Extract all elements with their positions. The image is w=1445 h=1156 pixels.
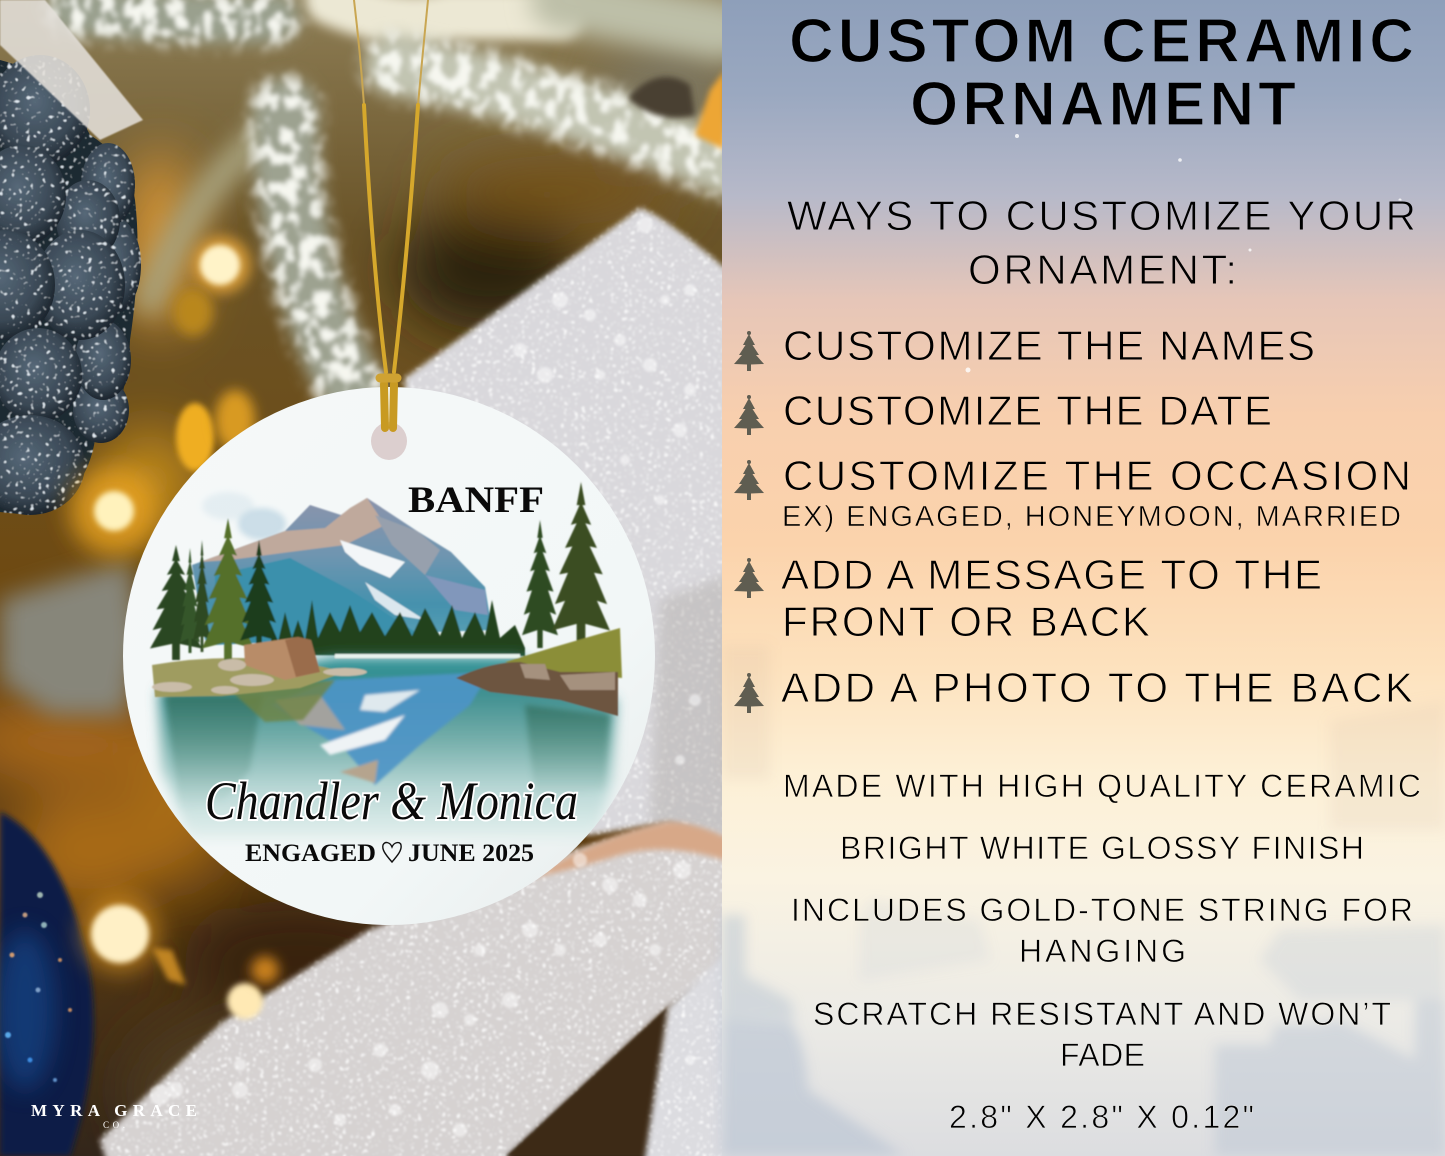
frosted branch top [70,10,275,18]
item: message [781,551,1322,645]
watercolor sky background [722,0,1445,1156]
faded skyline [722,645,1445,1156]
feature: durability: FADE [1060,1037,1145,1073]
occasion and date: JUNE 2025 [408,840,534,867]
right shore rocks [456,662,618,716]
title: CUSTOM CERAMIC [789,7,1414,76]
feature: string: INCLUDES GOLD-TONE STRING FOR [791,892,1413,928]
product details panel [722,0,1445,1156]
icon: heart [383,843,401,862]
title: ORNAMENT [910,70,1296,139]
lower glitter ribbon [100,822,750,1156]
frosted branch upper right [395,65,725,165]
reflection of left shore [230,680,335,722]
feature: string [791,892,1413,969]
clouds [202,492,286,540]
watermark: CO. [103,1120,125,1130]
dark gap between ribbons [507,1007,668,1156]
feature: dimensions: 2.8" X 2.8" X 0.12" [949,1099,1254,1135]
ribbon sparkle bokeh [150,217,701,1137]
item: occasion: CUSTOMIZE THE OCCASION [783,452,1411,499]
blue glitter bauble [0,812,94,1156]
blurred branch lower left [0,560,140,715]
frosted branch center [285,110,350,385]
blue-grey glitter baubles [0,55,141,515]
ornament hole [371,422,407,460]
silver glitter ribbon [400,208,750,850]
icon: tree [734,331,764,371]
distant treeline [270,600,525,656]
item: photo: ADD A PHOTO TO THE BACK [781,664,1413,711]
boulder [244,637,320,680]
right bank [505,628,622,678]
gold string [354,0,428,372]
item: occasion: EX) ENGAGED, HONEYMOON, MARRIED [782,501,1401,533]
occasion and date: ENGAGED [245,840,376,867]
icon: tree [734,395,764,435]
tree reflections [165,695,610,810]
item: message: FRONT OR BACK [782,598,1150,645]
mountain reflection [270,672,490,785]
shore rocks [152,659,367,694]
photo panel: Christmas tree background [0,0,750,1156]
customization list [734,322,1413,713]
item: occasion [782,452,1411,533]
lake [158,657,616,840]
left shore [152,658,345,697]
left pine trees [150,518,278,663]
couple names: Chandler & Monica [205,771,578,831]
ribbon tail [640,960,722,1156]
feature: durability: SCRATCH RESISTANT AND WON’T [813,996,1391,1032]
feature: finish: BRIGHT WHITE GLOSSY FINISH [840,830,1364,866]
watermark: MYRA GRACE [31,1101,197,1120]
item: names: CUSTOMIZE THE NAMES [783,322,1315,369]
string knot [380,378,397,428]
product features [783,768,1421,1135]
feature: string: HANGING [1019,933,1186,969]
title [789,7,1414,139]
item: message: ADD A MESSAGE TO THE [781,551,1322,598]
frosted pine branches [0,0,725,715]
snow specks [966,26,1402,372]
item: date: CUSTOMIZE THE DATE [783,387,1272,434]
occasion and date [245,840,534,867]
watermark [31,1101,197,1130]
subheading [787,192,1416,293]
subheading: ORNAMENT: [968,246,1237,293]
warm background glow [0,40,740,1156]
subheading: WAYS TO CUSTOMIZE YOUR [787,192,1416,239]
feature: durability [813,996,1391,1073]
ornament disc [123,387,655,925]
ceramic ornament [123,378,655,925]
landscape illustration [150,482,622,840]
feature: ceramic: MADE WITH HIGH QUALITY CERAMIC [783,768,1421,804]
bokeh lights [70,70,725,1019]
mountain [192,498,492,645]
right pine trees [522,482,610,648]
sheer ribbon bow [0,0,143,140]
icon: tree [734,460,764,500]
icon: tree [734,673,764,713]
icon: tree [734,558,764,598]
location label: BANFF [408,480,544,521]
